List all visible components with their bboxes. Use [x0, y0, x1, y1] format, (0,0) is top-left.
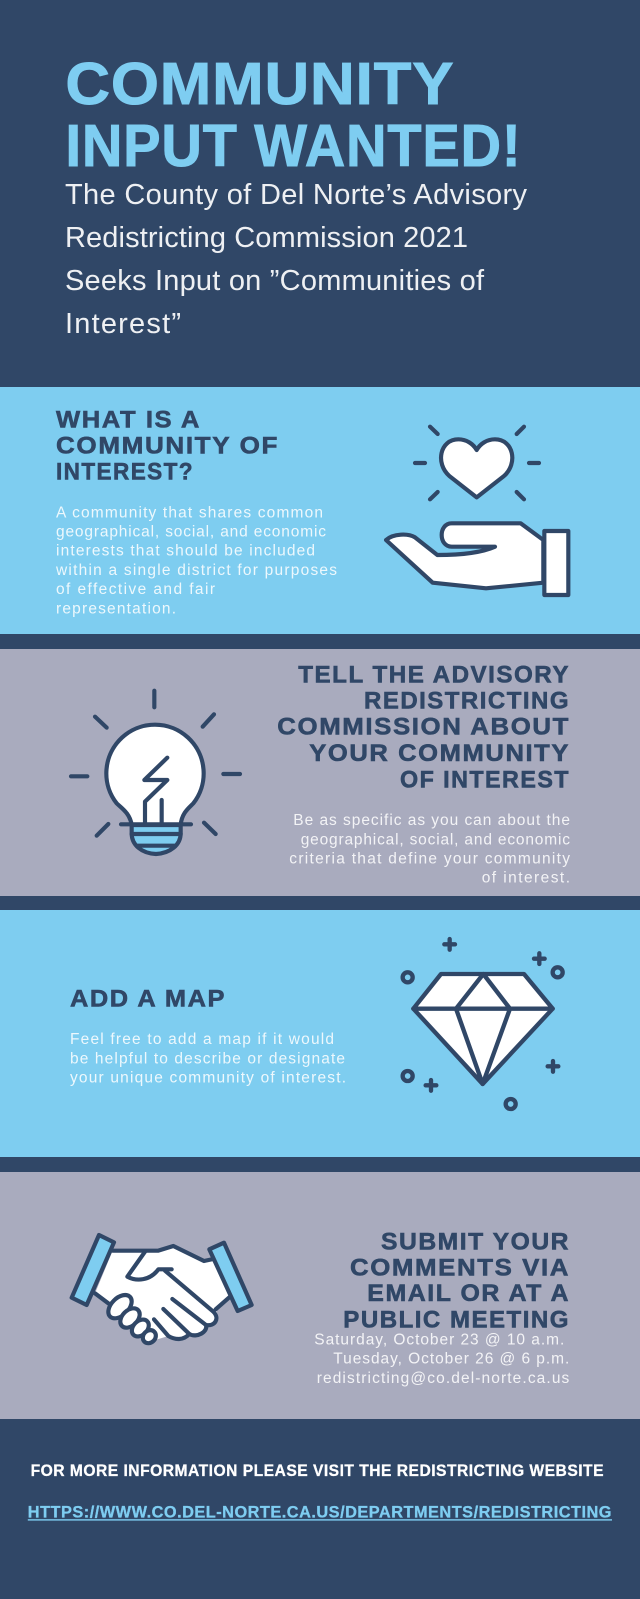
text block: be specific: geographical, social, and economic	[301, 831, 570, 848]
heading: add a map: ADD A MAP	[70, 986, 226, 1013]
heading: what is a community of interest: COMMUNITY OF	[56, 433, 279, 460]
heading: tell the commission: YOUR COMMUNITY	[309, 740, 570, 767]
icon: diamond	[403, 939, 563, 1109]
subtitle: The County of Del Norte’s Advisory	[65, 179, 528, 211]
text block: definition: interests that should be included	[56, 543, 315, 560]
text block: definition: geographical, social, and economic	[56, 524, 326, 541]
title	[66, 51, 522, 179]
heading: what is a community of interest: INTEREST?	[56, 459, 194, 486]
text block: definition: of effective and fair	[56, 581, 215, 598]
text block: map description: be helpful to describe or designate	[70, 1050, 345, 1067]
subtitle: Redistricting Commission 2021	[65, 222, 468, 254]
heading: tell the commission	[277, 662, 570, 793]
heading: tell the commission: REDISTRICTING	[364, 688, 570, 715]
heading: submit your comments: EMAIL OR AT A	[367, 1280, 570, 1307]
heading: tell the commission: OF INTEREST	[400, 766, 570, 793]
text block: be specific: criteria that define your community	[289, 850, 570, 867]
text block: meeting dates and email: Tuesday, October 26 @ 6 p.m.	[333, 1351, 569, 1368]
text block: meeting dates and email: redistricting@co.del-norte.ca.us	[317, 1370, 570, 1387]
heading: submit your comments: COMMENTS VIA	[350, 1254, 570, 1281]
text block: definition	[55, 504, 337, 617]
text block: be specific: of interest.	[482, 869, 570, 886]
text block: be specific: Be as specific as you can about the	[293, 812, 570, 829]
panel: tell the advisory redistricting commission	[0, 649, 640, 896]
heading: tell the commission: COMMISSION ABOUT	[277, 714, 570, 741]
heading: what is a community of interest: WHAT IS A	[56, 406, 201, 433]
panel: add a map	[0, 910, 640, 1157]
text block: definition: A community that shares common	[56, 504, 323, 521]
text block: map description: Feel free to add a map if it would	[70, 1031, 334, 1048]
subtitle	[65, 179, 528, 340]
subtitle: Seeks Input on ”Communities of	[65, 265, 485, 297]
title: INPUT WANTED!	[66, 113, 522, 179]
text block: definition: representation.	[56, 600, 176, 617]
icon: light bulb	[71, 691, 240, 854]
heading: tell the commission: TELL THE ADVISORY	[298, 662, 570, 689]
panel: what is a community of interest	[0, 387, 640, 634]
icon: handshake	[72, 1235, 252, 1346]
title: COMMUNITY	[66, 51, 454, 117]
heading: submit your comments: PUBLIC MEETING	[343, 1306, 570, 1333]
subtitle: Interest”	[65, 308, 181, 340]
text block: meeting dates and email: Saturday, October 23 @ 10 a.m.	[314, 1331, 564, 1348]
heading: what is a community of interest	[56, 406, 279, 486]
text block: map description	[70, 1031, 346, 1087]
footer: website link: HTTPS://WWW.CO.DEL-NORTE.CA.US/DEPARTMENTS/REDISTRICTING	[28, 1504, 612, 1522]
text block: meeting dates and email	[314, 1331, 570, 1387]
footer: more information: FOR MORE INFORMATION PLEASE VISIT THE REDISTRICTING WEBSITE	[31, 1462, 604, 1480]
text block: be specific	[289, 812, 570, 886]
heading: submit your comments: SUBMIT YOUR	[381, 1228, 570, 1255]
panel: submit your comments	[0, 1172, 640, 1419]
text block: definition: within a single district for purposes	[55, 562, 337, 579]
heading: submit your comments	[343, 1228, 570, 1333]
icon: heart in hand	[386, 427, 568, 595]
text block: map description: your unique community of interest.	[70, 1070, 346, 1087]
